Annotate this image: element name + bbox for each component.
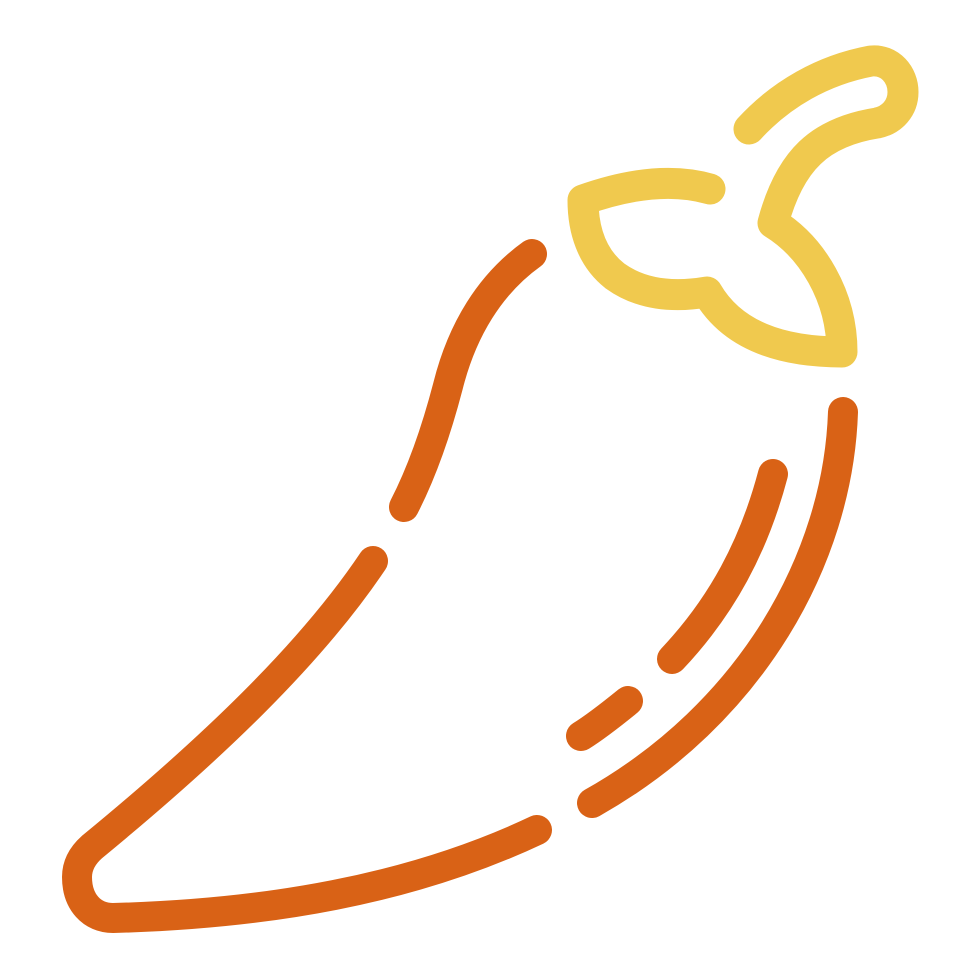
pepper body outline <box>77 254 843 918</box>
pepper stem and calyx <box>583 61 903 352</box>
